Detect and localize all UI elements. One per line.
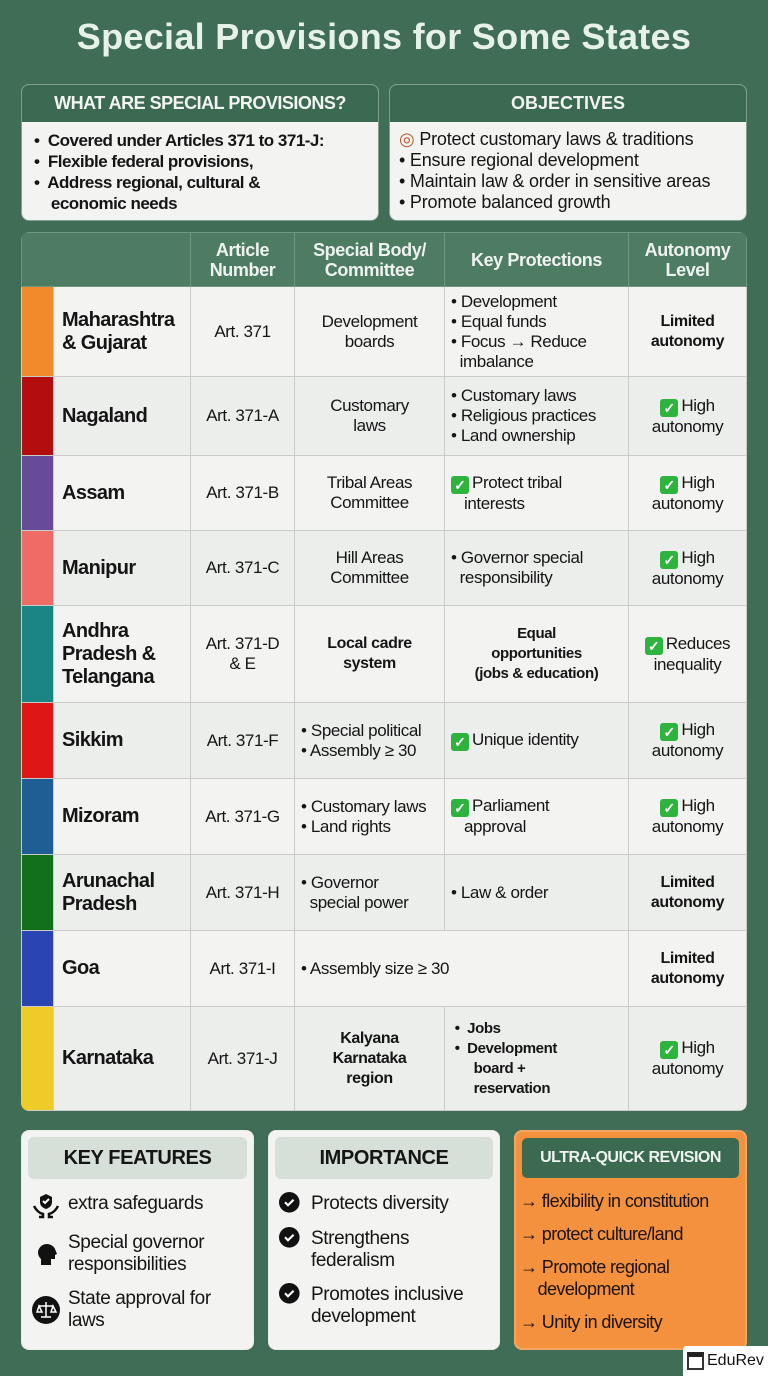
table: states: • Focus → Reduce (451, 332, 587, 350)
table: states: • Land ownership (451, 426, 575, 445)
table: states: interests (464, 494, 525, 512)
table: states: Article (216, 240, 269, 260)
title: Special Provisions for Some States (77, 16, 691, 57)
table: states: ✓ (663, 1042, 675, 1058)
table: states: Goa (62, 957, 99, 979)
text block: → Promote regional (520, 1257, 669, 1277)
table: states: reservation (474, 1080, 550, 1096)
table: states: responsibility (460, 568, 552, 587)
item (279, 1283, 463, 1327)
table: states: Equal (517, 625, 556, 642)
table: states: Number (210, 260, 275, 280)
table: states: Art. 371-I (210, 958, 275, 978)
text block: • Address regional, cultural & (34, 173, 260, 192)
table: states: Art. 371-H (206, 882, 279, 902)
table: states: • Equal funds (451, 312, 546, 330)
table: states: High (681, 472, 715, 492)
table: states: Special Body/ (313, 240, 426, 260)
text block: economic needs (51, 194, 177, 213)
table: states: boards (345, 332, 394, 350)
heading (390, 85, 746, 122)
table: states: Committee (325, 260, 414, 280)
table: states: Art. 371-A (206, 406, 279, 425)
text block: → Unity in diversity (520, 1312, 662, 1332)
table: states (21, 232, 747, 1111)
table: states: (jobs & education) (475, 665, 598, 682)
heading (22, 85, 378, 122)
table: states: Karnataka (62, 1047, 153, 1069)
table: states: Telangana (62, 666, 154, 688)
table: states: Kalyana (340, 1030, 399, 1046)
table: states: Committee (330, 568, 409, 587)
table: states: Manipur (62, 556, 136, 578)
table: states: Art. 371-G (205, 806, 280, 826)
heading: ULTRA-QUICK REVISION (540, 1149, 721, 1166)
heading (28, 1137, 247, 1179)
logo: EduRev: EduRev (707, 1352, 764, 1369)
table: states: Art. 371 (214, 322, 271, 340)
table: states: • Law & order (451, 882, 548, 902)
text block (399, 129, 710, 212)
item: state approval (32, 1288, 211, 1331)
logo: EduRev (683, 1346, 768, 1376)
table: states: • Jobs (455, 1020, 501, 1036)
text block: • Covered under Articles 371 to 371-J: (34, 131, 324, 150)
table: states: autonomy (652, 741, 723, 760)
panel: objectives (389, 84, 747, 221)
table: states: Arunachal (62, 870, 154, 892)
table: states: laws (353, 416, 386, 435)
item: state approval: laws (68, 1310, 104, 1331)
table: states: ✓ (454, 800, 466, 816)
table: states: • Land rights (301, 816, 391, 836)
table: states: Andhra (62, 620, 128, 642)
item: Promotes inclusive (311, 1284, 463, 1305)
table: states: Art. 371-J (208, 1048, 277, 1068)
item: federalism (311, 1250, 395, 1271)
table: states: • Assembly size ≥ 30 (301, 958, 449, 978)
item: extra safeguards: extra safeguards (68, 1193, 203, 1214)
table: states: Art. 371-C (206, 558, 279, 577)
table: states: High (681, 796, 715, 815)
table: states: • Customary laws (451, 386, 576, 405)
text block (520, 1191, 709, 1332)
table: states: • Assembly ≥ 30 (301, 740, 416, 760)
heading: IMPORTANCE (320, 1147, 448, 1169)
table: states: Level (665, 260, 710, 280)
table: states: Autonomy (645, 240, 730, 260)
table: states: Pradesh (62, 892, 137, 914)
table: states: Reduces (666, 634, 730, 652)
text block: • Ensure regional development (399, 150, 639, 170)
heading (522, 1138, 739, 1178)
table: states: High (681, 396, 715, 414)
panel: what are special provisions (21, 84, 379, 221)
table: states: Art. 371-D (206, 634, 279, 653)
table: states: Unique identity (472, 730, 578, 749)
text block: • Promote balanced growth (399, 192, 610, 212)
table: states: special power (310, 892, 408, 912)
table: states: • Customary laws (301, 796, 426, 816)
table: states: autonomy (651, 894, 724, 910)
table: states: autonomy (652, 416, 723, 436)
item: governor: responsibilities (68, 1254, 186, 1275)
table: states: High (681, 1038, 715, 1057)
table: states: Customary (330, 396, 409, 415)
table: states: opportunities (491, 645, 582, 662)
text block: ◎ Protect customary laws & traditions (399, 129, 693, 149)
item: development (311, 1306, 415, 1327)
panel: key features (21, 1130, 254, 1350)
panel: importance (268, 1130, 500, 1350)
heading: OBJECTIVES (511, 93, 625, 113)
table: states: region (346, 1070, 393, 1086)
table: states: & E (229, 654, 256, 673)
item: Strengthens (311, 1228, 409, 1249)
item: governor (38, 1232, 204, 1275)
table: states: Protect tribal (472, 472, 562, 492)
table: states: ✓ (454, 734, 466, 750)
text block: development (538, 1279, 634, 1299)
table: states: Tribal Areas (327, 473, 412, 492)
table: states: autonomy (652, 568, 723, 588)
table: states: Committee (330, 493, 409, 512)
heading (275, 1137, 493, 1179)
table: states: Limited (660, 312, 715, 330)
item: state approval: State approval for (68, 1288, 211, 1309)
table: states: inequality (654, 654, 721, 674)
table: states: Limited (660, 950, 715, 966)
text block: → flexibility in constitution (520, 1191, 709, 1211)
table: states: Art. 371-F (207, 730, 278, 750)
table: states: ✓ (454, 476, 466, 492)
panel: ultra-quick revision (514, 1130, 747, 1350)
table: states: Pradesh & (62, 642, 156, 664)
table: states: • Governor special (451, 548, 583, 567)
text block: → protect culture/land (520, 1224, 683, 1244)
item: governor: Special governor (68, 1232, 204, 1253)
item: Protects diversity (311, 1193, 448, 1214)
item (279, 1227, 409, 1271)
heading: WHAT ARE SPECIAL PROVISIONS? (54, 93, 346, 113)
table: states: & Gujarat (62, 332, 147, 354)
table: states: Key Protections (471, 250, 602, 270)
table: states: High (681, 720, 715, 739)
table: states: Sikkim (62, 729, 123, 751)
table: states: Development (322, 312, 417, 330)
table: states: approval (464, 817, 526, 836)
table: states: board + (474, 1060, 525, 1076)
table: states: Mizoram (62, 805, 139, 827)
text block (34, 131, 324, 213)
table: states: • Development (455, 1040, 557, 1056)
table: states: Karnataka (333, 1050, 406, 1066)
text block: • Maintain law & order in sensitive areas (399, 171, 710, 191)
table: states: ✓ (663, 400, 675, 416)
table: states: ✓ (648, 638, 660, 654)
table: states: Nagaland (62, 404, 147, 426)
item: extra safeguards (32, 1193, 203, 1218)
table: states: autonomy (652, 1059, 723, 1078)
table: states: ✓ (663, 724, 675, 740)
table: states: Maharashtra (62, 308, 174, 330)
table: states: autonomy (651, 332, 724, 350)
table: states: ✓ (663, 800, 675, 816)
table: states: imbalance (460, 352, 534, 370)
table: states: Parliament (472, 796, 549, 815)
table: states: autonomy (651, 970, 724, 986)
heading: KEY FEATURES (64, 1147, 211, 1169)
table: states: • Religious practices (451, 406, 596, 425)
table: states: system (343, 655, 396, 672)
table: states: Hill Areas (336, 548, 403, 567)
table: states: • Special political (301, 720, 421, 740)
table: states: autonomy (652, 494, 723, 512)
table: states: Assam (62, 482, 125, 504)
table: states: autonomy (652, 817, 723, 836)
table: states: Art. 371-B (206, 483, 279, 502)
table: states: Limited (660, 874, 715, 890)
table: states: • Governor (301, 872, 379, 892)
table: states: High (681, 548, 715, 566)
table: states: Local cadre (327, 635, 412, 652)
table: states: ✓ (663, 552, 675, 568)
text block: • Flexible federal provisions, (34, 152, 253, 171)
table: states: ✓ (663, 476, 675, 492)
table: states: • Development (451, 292, 557, 310)
